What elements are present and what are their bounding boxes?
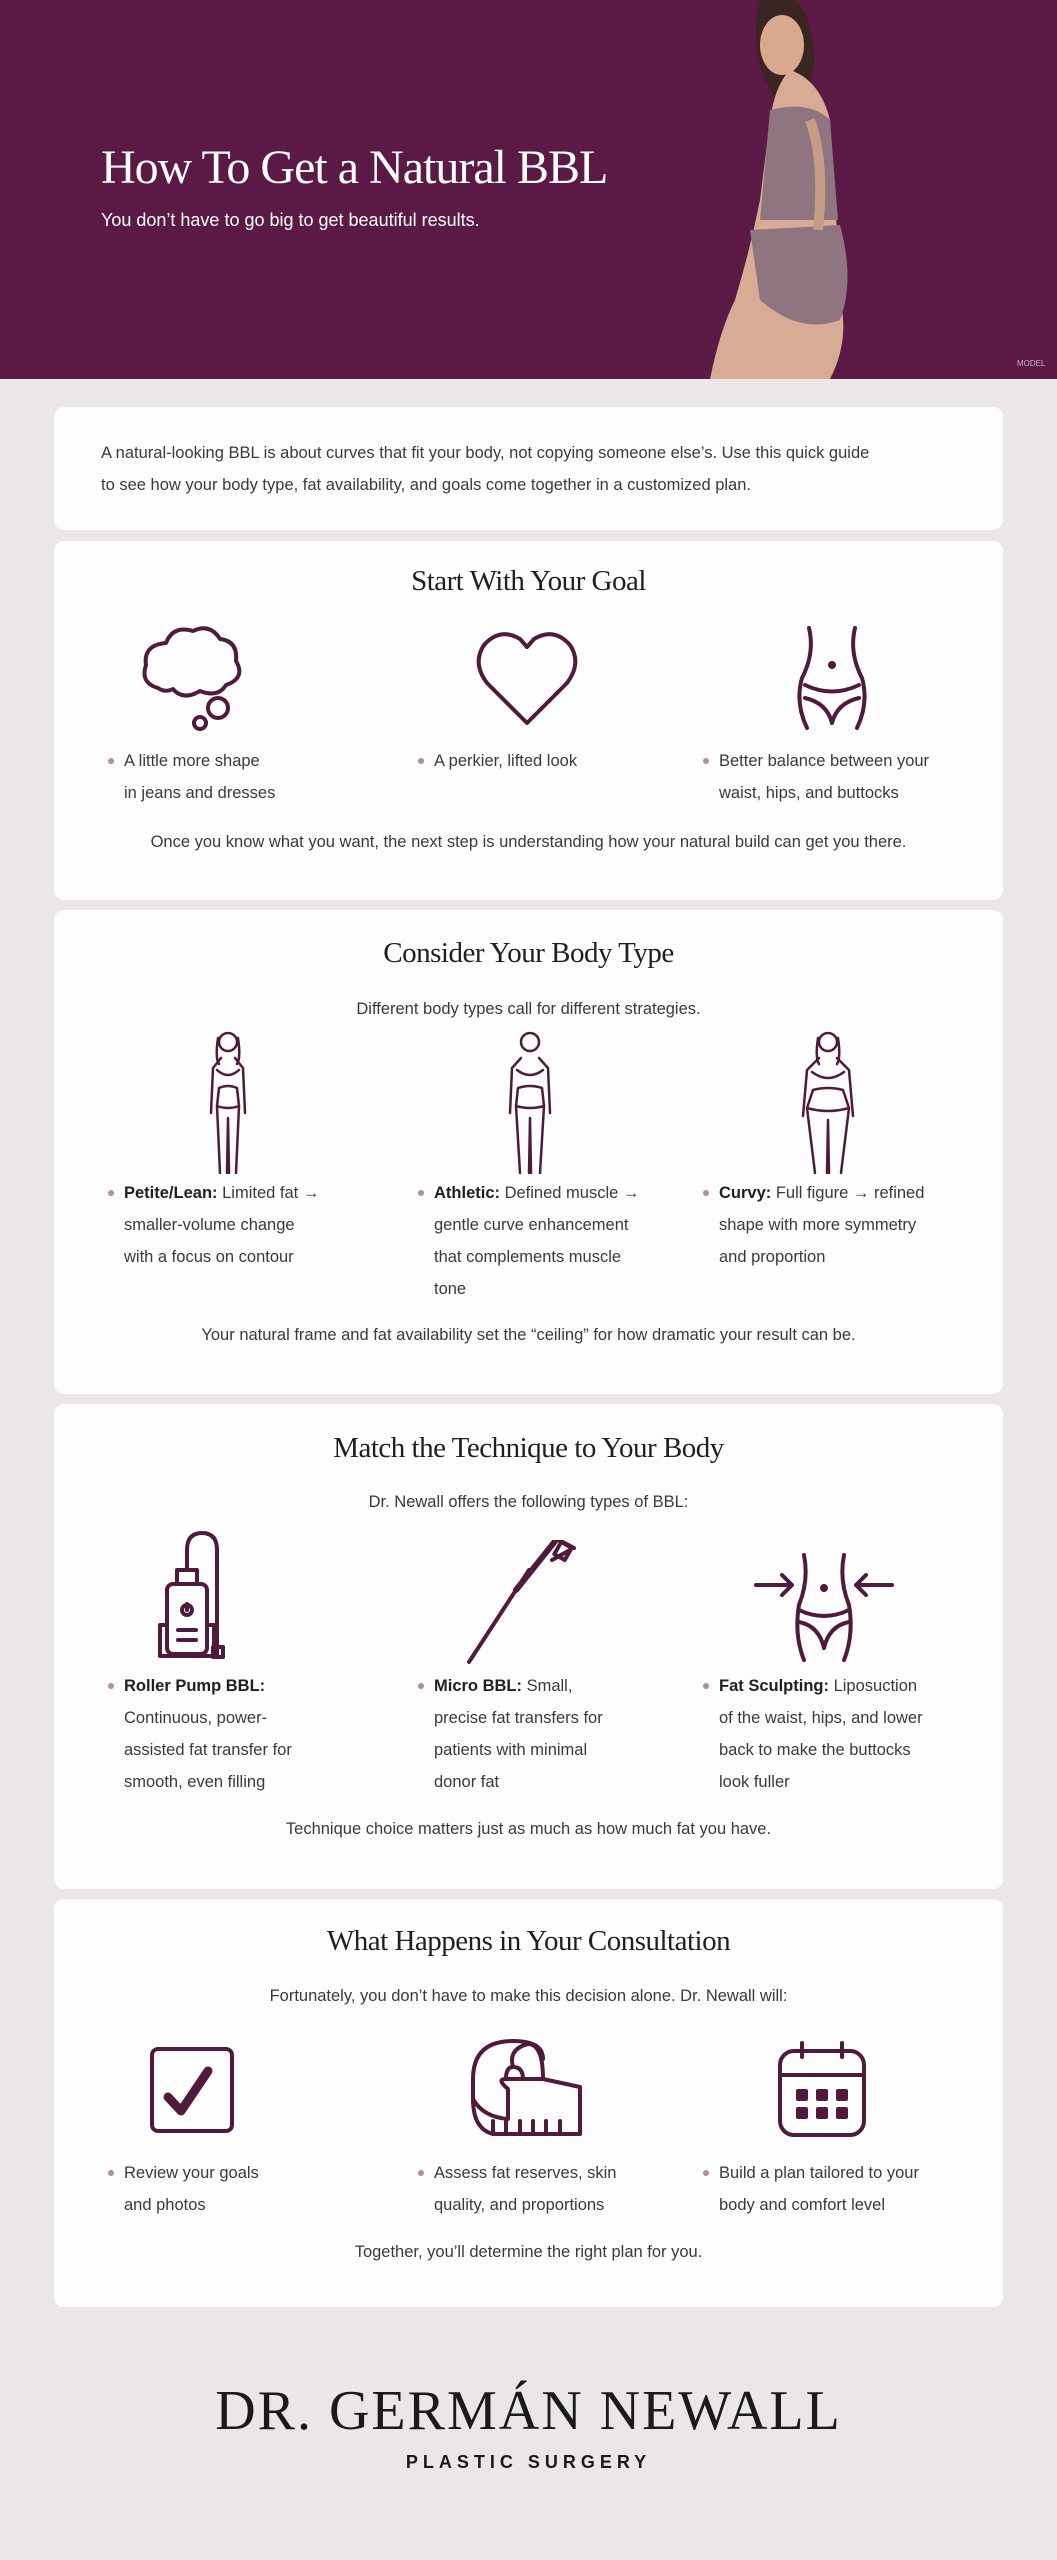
bullet: perkier: A perkier, lifted look <box>434 752 577 770</box>
bullet: balance <box>703 745 929 809</box>
bullet: fat sculpting: Fat Sculpting: Liposuction <box>719 1677 917 1695</box>
title: How To Get a Natural BBL <box>101 141 607 194</box>
icon: roller pump <box>158 1531 225 1659</box>
heading: Match the Technique to Your Body <box>333 1432 724 1464</box>
panel: technique <box>54 1404 1003 1889</box>
bullet: petite: with a focus on contour <box>124 1248 294 1266</box>
bullet: review: and photos <box>124 2196 206 2214</box>
bullet: roller pump: Continuous, power- <box>124 1709 267 1727</box>
bullet: micro: precise fat transfers for <box>434 1709 603 1727</box>
bullet: micro: patients with minimal <box>434 1741 587 1759</box>
bullet: balance: waist, hips, and buttocks <box>719 784 899 802</box>
panel: body type <box>54 910 1003 1394</box>
bullet: assess: Assess fat reserves, skin <box>434 2164 616 2182</box>
icon: curvy figure <box>802 1032 854 1174</box>
subheading: Different body types call for different strategies. <box>356 1000 701 1018</box>
bullet: micro: donor fat <box>434 1773 499 1791</box>
panel: start with your goal <box>54 541 1003 900</box>
logo <box>215 2380 842 2472</box>
bullet: build plan: Build a plan tailored to your <box>719 2164 919 2182</box>
bullet: micro: Micro BBL: Small, <box>434 1677 572 1695</box>
icon: fat sculpting waist <box>754 1553 894 1662</box>
icon: tape measure <box>470 2039 582 2136</box>
bullet: review: Review your goals <box>124 2164 259 2182</box>
bullet: roller pump: assisted fat transfer for <box>124 1741 292 1759</box>
bullet: curvy <box>703 1177 924 1273</box>
bullet: assess <box>418 2157 616 2221</box>
intro text <box>101 444 869 494</box>
bullet: build plan: body and comfort level <box>719 2196 885 2214</box>
panel: consultation <box>54 1899 1003 2307</box>
bullet: curvy: Curvy: Full figure → refined <box>719 1184 924 1202</box>
icon: heart <box>476 632 578 726</box>
bullet: athletic: Athletic: Defined muscle → <box>434 1184 639 1202</box>
bullet: fat sculpting <box>703 1670 923 1798</box>
footer text: Together, you’ll determine the right plan for you. <box>355 2243 702 2261</box>
icon: petite figure <box>210 1032 246 1174</box>
heading: Consider Your Body Type <box>383 937 674 969</box>
subtitle: You don’t have to go big to get beautiful results. <box>101 210 480 230</box>
subheading: Dr. Newall offers the following types of BBL: <box>369 1493 688 1511</box>
bullet: petite <box>108 1177 319 1273</box>
model caption: MODEL <box>1017 359 1045 368</box>
bullet: curvy: shape with more symmetry <box>719 1216 916 1234</box>
icon: calendar <box>778 2041 866 2137</box>
bullet: fat sculpting: of the waist, hips, and lower <box>719 1709 923 1727</box>
footer text: Technique choice matters just as much as how much fat you have. <box>286 1820 771 1838</box>
intro text: to see how your body type, fat availability, and goals come together in a customized plan. <box>101 476 751 494</box>
bullet: athletic: that complements muscle <box>434 1248 621 1266</box>
heading: What Happens in Your Consultation <box>327 1925 730 1957</box>
bullet: shape: in jeans and dresses <box>124 784 275 802</box>
subheading: Fortunately, you don’t have to make this decision alone. Dr. Newall will: <box>270 1987 787 2005</box>
bullet: shape: A little more shape <box>124 752 260 770</box>
bullet: build plan <box>703 2157 919 2221</box>
bullet: athletic: gentle curve enhancement <box>434 1216 628 1234</box>
icon: checkbox <box>150 2047 234 2133</box>
bullet: shape <box>108 745 275 809</box>
icon: waist <box>797 626 867 730</box>
header banner <box>0 0 1057 379</box>
bullet: curvy: and proportion <box>719 1248 825 1266</box>
bullet: petite: smaller-volume change <box>124 1216 295 1234</box>
bullet: roller pump <box>108 1670 292 1798</box>
footer text: Once you know what you want, the next step is understanding how your natural build can get you there. <box>151 833 906 851</box>
bullet: petite: Petite/Lean: Limited fat → <box>124 1184 319 1202</box>
bullet: review <box>108 2157 259 2221</box>
bullet: assess: quality, and proportions <box>434 2196 604 2214</box>
logo tagline: PLASTIC SURGERY <box>406 2452 651 2472</box>
footer text: Your natural frame and fat availability set the “ceiling” for how dramatic your result can be. <box>201 1326 856 1344</box>
bullet: roller pump: Roller Pump BBL: <box>124 1677 265 1695</box>
bullet: balance: Better balance between your <box>719 752 929 770</box>
icon: athletic figure <box>508 1032 552 1174</box>
intro card <box>54 407 1003 530</box>
model photo illustration <box>710 0 848 379</box>
bullet: roller pump: smooth, even filling <box>124 1773 265 1791</box>
logo name: DR. GERMÁN NEWALL <box>215 2380 842 2442</box>
bullet: micro <box>418 1670 603 1798</box>
bullet: fat sculpting: back to make the buttocks <box>719 1741 911 1759</box>
intro text: A natural-looking BBL is about curves that fit your body, not copying someone else’s. Use this quick guide <box>101 444 869 462</box>
bullet: fat sculpting: look fuller <box>719 1773 790 1791</box>
heading: Start With Your Goal <box>411 565 646 597</box>
bullet: athletic <box>418 1177 639 1305</box>
icon: cannula <box>466 1540 576 1664</box>
icon: thought bubble <box>142 626 242 731</box>
bullet: athletic: tone <box>434 1280 466 1298</box>
